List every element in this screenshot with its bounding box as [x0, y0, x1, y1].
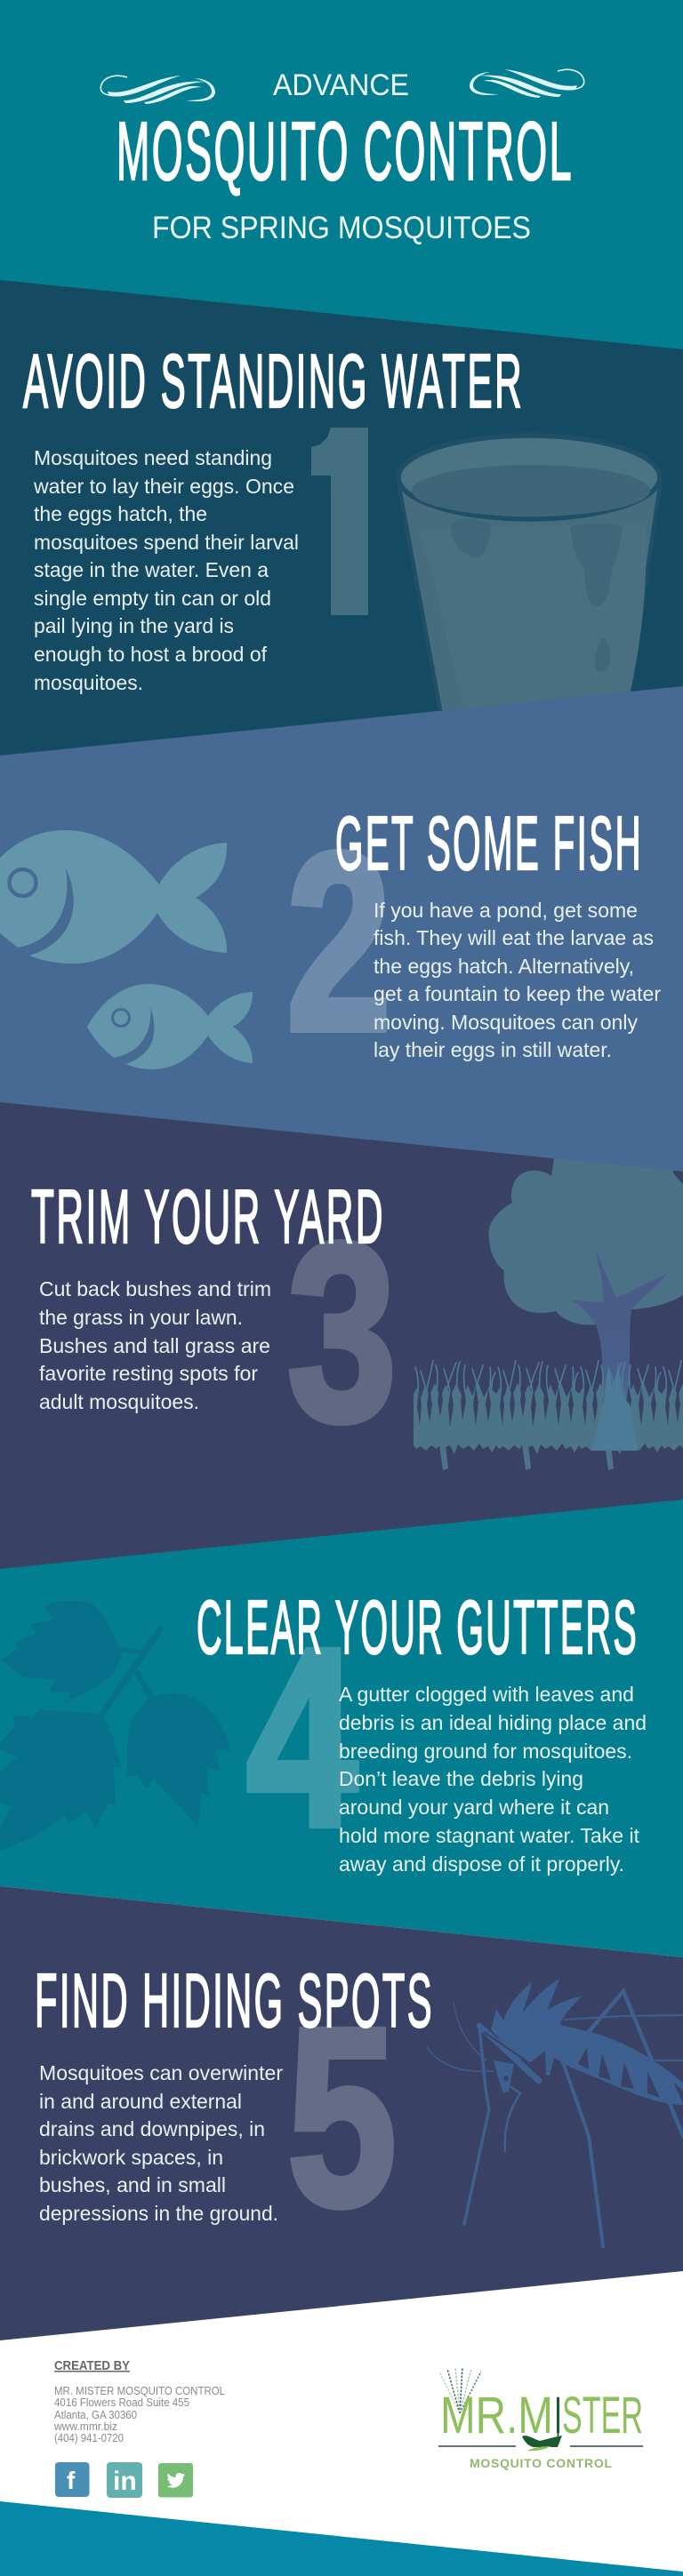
body text: A gutter clogged with leaves and [339, 1683, 634, 1706]
header background [0, 0, 683, 356]
body text: favorite resting spots for [39, 1362, 258, 1385]
body text: hold more stagnant water. Take it [339, 1824, 640, 1847]
subtitle: FOR SPRING MOSQUITOES [152, 211, 531, 245]
body text: around your yard where it can [339, 1796, 609, 1819]
number 3: 3 [287, 1191, 397, 1474]
body text: moving. Mosquitoes can only [374, 1011, 638, 1034]
body text [374, 899, 661, 1061]
body text: If you have a pond, get some [374, 899, 638, 922]
address block [53, 2385, 225, 2444]
panel: find hiding spots [0, 1886, 683, 2347]
logo: mr mister [438, 2367, 643, 2470]
body text: enough to host a brood of [34, 643, 268, 666]
icon: facebook [55, 2462, 89, 2497]
body text: lay their eggs in still water. [374, 1038, 612, 1061]
body text: drains and downpipes, in [39, 2117, 265, 2140]
body text: mosquitoes. [34, 671, 143, 694]
panel: get some fish [0, 686, 683, 1172]
icon: big fish [0, 830, 227, 964]
title: advance: ADVANCE [273, 68, 409, 102]
body text: away and dispose of it properly. [339, 1852, 624, 1876]
panel: trim your yard [0, 1093, 683, 1578]
address block: Atlanta, GA 30360 [54, 2409, 137, 2421]
body text: brickwork spaces, in [39, 2146, 223, 2169]
body text: breeding ground for mosquitoes. [339, 1740, 632, 1763]
address block: MR. MISTER MOSQUITO CONTROL [54, 2385, 225, 2397]
body text: the eggs hatch, the [34, 502, 207, 525]
body text: stage in the water. Even a [34, 558, 269, 581]
number 5: 5 [287, 1976, 397, 2259]
body text: fish. They will eat the larvae as [374, 926, 654, 949]
body text: Mosquitoes can overwinter [39, 2061, 283, 2084]
panel: avoid standing water [0, 280, 683, 764]
icon: linkedin: in [113, 2467, 137, 2496]
body text: Bushes and tall grass are [39, 1334, 270, 1357]
icon: twitter [158, 2463, 193, 2498]
panel: clear your gutters [0, 1500, 683, 1957]
body text [339, 1683, 647, 1876]
left flourish [100, 76, 215, 104]
icon: mosquito [427, 1979, 683, 2246]
address block: 4016 Flowers Road Suite 455 [54, 2396, 189, 2409]
footer panel [0, 2271, 683, 2576]
title block [100, 68, 584, 245]
number 1: 1 [246, 380, 442, 662]
logo: mr mister: MOSQUITO CONTROL [470, 2456, 612, 2470]
address block: www.mmr.biz [53, 2420, 117, 2433]
created by heading: CREATED BY [54, 2358, 130, 2373]
icon: facebook: f [67, 2467, 76, 2494]
body text: get a fountain to keep the water [374, 982, 661, 1005]
body text: water to lay their eggs. Once [33, 475, 294, 498]
body text: in and around external [39, 2090, 242, 2113]
body text [33, 446, 299, 694]
body text: bushes, and in small [39, 2173, 226, 2196]
body text: the eggs hatch. Alternatively, [374, 955, 634, 978]
icon: leaves [0, 1601, 231, 1851]
body text: Mosquitoes need standing [34, 446, 272, 469]
body text: adult mosquitoes. [39, 1390, 199, 1413]
body text [39, 2061, 283, 2225]
body text: pail lying in the yard is [34, 614, 234, 637]
number 4: 4 [246, 1596, 358, 1879]
body text: Don’t leave the debris lying [339, 1767, 583, 1790]
body text: mosquitoes spend their larval [34, 531, 299, 554]
bottom band [0, 2501, 683, 2576]
body text: depressions in the ground. [39, 2202, 278, 2225]
logo: mr mister: MR.M [440, 2387, 553, 2444]
body text: Cut back bushes and trim [39, 1277, 271, 1300]
icon: linkedin [107, 2462, 142, 2498]
body text: the grass in your lawn. [39, 1306, 243, 1329]
body text [39, 1277, 271, 1413]
right flourish [470, 69, 584, 98]
logo: mr mister: I [554, 2387, 562, 2444]
icon: small fish [87, 984, 253, 1069]
icon: tree and grass [414, 1147, 683, 1471]
address block: (404) 941-0720 [54, 2432, 124, 2444]
body text: single empty tin can or old [34, 587, 271, 610]
icon: glass [398, 436, 660, 720]
number 2: 2 [286, 801, 391, 1084]
body text: debris is an ideal hiding place and [339, 1711, 647, 1734]
